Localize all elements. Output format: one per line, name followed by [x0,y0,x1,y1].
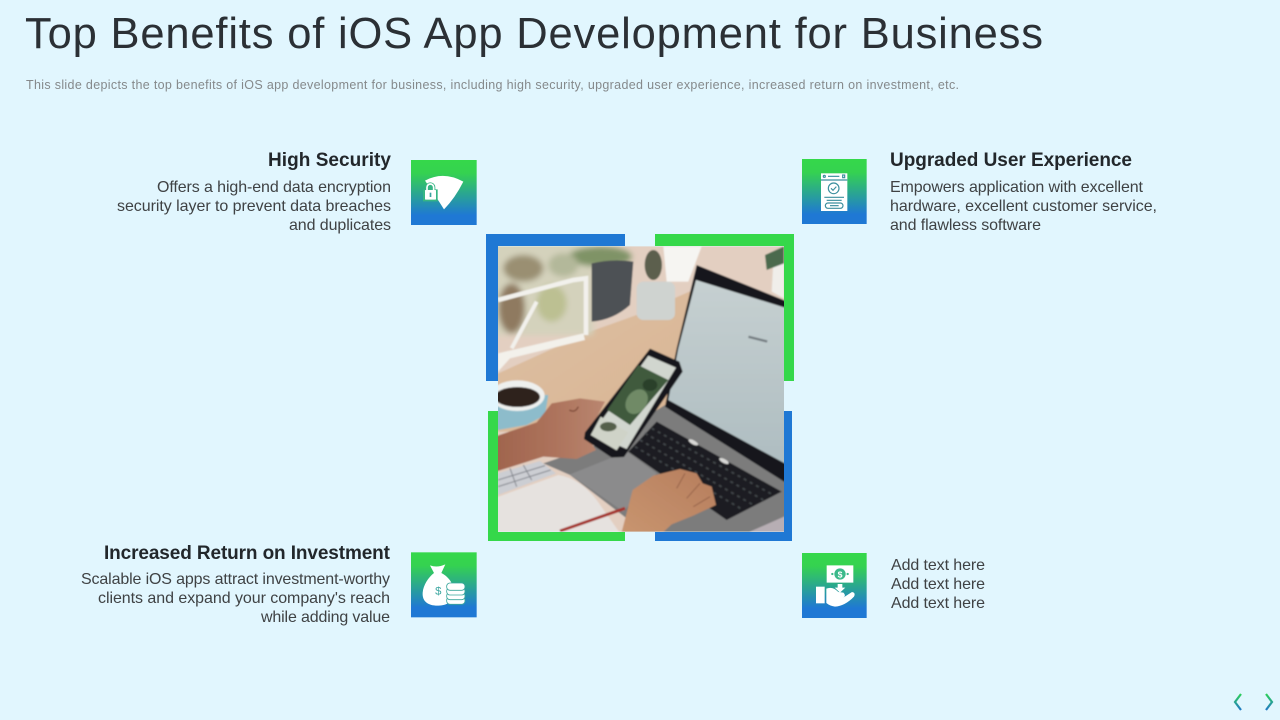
heading: increased return on investment: Increased Return on Investment [104,543,391,564]
description: increased return on investment: clients and expand your company's reach [98,590,390,607]
block: placeholder text: Add text here [891,595,985,612]
icon: hand receiving money [802,553,867,618]
icon: security wifi lock [411,160,477,225]
description: upgraded user experience: hardware, excellent customer service, [890,198,1157,215]
description: high security: Offers a high-end data encryption [157,179,391,196]
block: upgraded user experience text [890,150,1157,234]
photo: hands holding phone over laptop [498,246,784,532]
description: increased return on investment: while adding value [260,609,390,626]
notebook [498,474,619,532]
bracket: bottom right blue [655,411,792,541]
block: placeholder text: Add text here [891,576,985,593]
icon: app screen with check [802,159,867,224]
description: upgraded user experience: Empowers application with excellent [890,179,1144,196]
phone [584,349,683,458]
description: upgraded user experience [890,179,1157,234]
icon: money bag and coins [411,552,477,617]
block: placeholder text: Add text here [891,557,985,574]
bracket: top left blue [486,234,625,381]
left hand [498,398,605,472]
subtitle: This slide depicts the top benefits of iOS app development for business, including high security, upgraded user experience, increased return on investment, etc. [26,78,959,92]
bracket: top right green [655,234,794,381]
description: high security: and duplicates [289,217,391,234]
block: increased return text [81,543,391,626]
laptop base [543,404,784,532]
block: placeholder text [891,557,985,612]
description: high security: security layer to prevent data breaches [117,198,391,215]
pencil [560,508,625,531]
description: upgraded user experience: and flawless software [890,217,1041,234]
bracket: bottom left green [488,411,625,541]
trackpad [570,452,657,512]
icon: money bag and coins: $ [435,586,442,598]
wood table [498,291,691,432]
keyboard [628,422,782,520]
title: Top Benefits of iOS App Development for Business [25,10,1043,58]
description: high security [117,179,391,234]
laptop lid [664,264,784,482]
description: increased return on investment [81,571,390,626]
grid paper [498,461,556,495]
block: high security text [117,150,391,234]
brackets and photo [480,225,800,545]
heading: upgraded user experience: Upgraded User Experience [890,150,1132,171]
right hand [620,469,716,538]
arrow: previous [1235,694,1241,710]
cup [493,395,548,430]
arrow: next [1266,694,1272,710]
description: increased return on investment: Scalable iOS apps attract investment-worthy [81,571,390,588]
laptop corner [750,516,784,532]
heading: high security: High Security [268,150,391,171]
icon: hand receiving money: $ [838,569,843,579]
